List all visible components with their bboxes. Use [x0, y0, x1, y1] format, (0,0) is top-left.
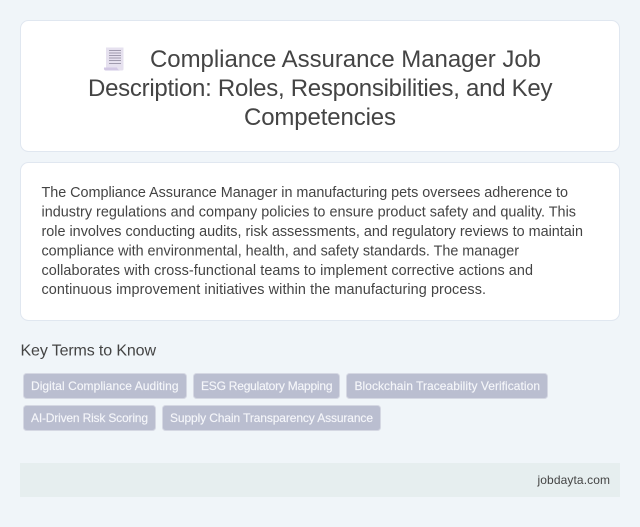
heading: key terms: Key Terms to Know	[20, 342, 156, 360]
tag: blockchain traceability verification	[346, 374, 548, 398]
tag: supply chain transparency assurance	[162, 406, 380, 430]
description text: The Compliance Assurance Manager in manufacturing pets oversees adherence to	[42, 185, 568, 201]
title: Description: Roles, Responsibilities, and Key	[88, 75, 552, 102]
description text: collaborates with cross-functional teams to implement corrective actions and	[42, 263, 533, 279]
tag: esg regulatory mapping: ESG Regulatory Mapping	[201, 379, 332, 393]
tag: supply chain transparency assurance: Supply Chain Transparency Assurance	[170, 411, 373, 425]
title: Competencies	[244, 104, 396, 131]
tag: ai-driven risk scoring	[24, 406, 156, 430]
icon: document scroll	[104, 48, 124, 70]
panel: title card	[20, 20, 620, 152]
tag: digital compliance auditing	[24, 374, 186, 398]
tag: esg regulatory mapping	[194, 374, 340, 398]
footer source: jobdayta.com	[536, 473, 610, 487]
tag: ai-driven risk scoring: AI-Driven Risk Scoring	[31, 411, 148, 425]
description text: role involves conducting audits, risk assessments, and regulatory reviews to maintain	[42, 224, 583, 240]
footer bar	[20, 463, 620, 497]
description text: industry regulations and company policies to ensure product safety and quality. This	[42, 204, 576, 220]
title	[88, 46, 552, 131]
panel: description card	[20, 162, 620, 320]
tag: digital compliance auditing: Digital Compliance Auditing	[31, 379, 178, 393]
description text: continuous improvement initiatives within the manufacturing process.	[42, 282, 486, 298]
description text	[42, 185, 583, 298]
tag list: key terms	[24, 374, 548, 430]
tag: blockchain traceability verification: Blockchain Traceability Verification	[354, 379, 540, 393]
description text: compliance with environmental, health, and safety standards. The manager	[42, 244, 519, 260]
title: Compliance Assurance Manager Job	[150, 46, 541, 73]
